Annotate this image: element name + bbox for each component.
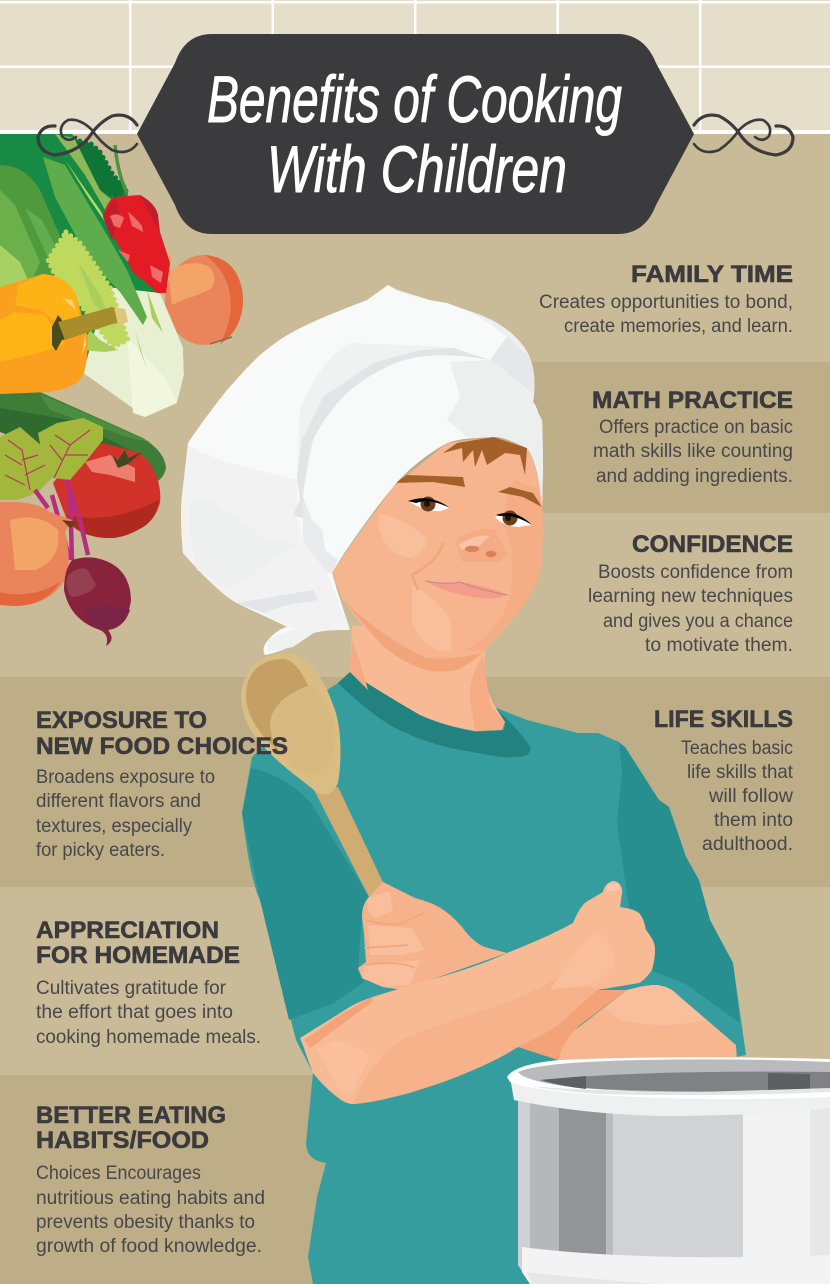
benefit: confidence: CONFIDENCE bbox=[632, 531, 793, 558]
beet stems bbox=[35, 480, 88, 560]
hair bbox=[443, 437, 527, 475]
eyes bbox=[410, 500, 450, 511]
benefit: exposure to new food choices: for picky eaters. bbox=[36, 840, 165, 861]
benefit: life skills: will follow bbox=[708, 786, 793, 807]
upper arm bbox=[558, 985, 737, 1060]
forearm and right hand bbox=[300, 881, 655, 1104]
onion bottom bbox=[0, 502, 78, 606]
tomato bbox=[53, 443, 160, 538]
pot rim bbox=[507, 1057, 830, 1099]
benefit: family time: Creates opportunities to bond, bbox=[539, 292, 793, 313]
benefit: better eating habits: HABITS/FOOD bbox=[36, 1127, 209, 1154]
left hand fist bbox=[358, 882, 507, 990]
benefit: math practice: math skills like counting bbox=[593, 441, 793, 462]
benefit: exposure to new food choices: textures, especially bbox=[36, 816, 192, 837]
eyebrows bbox=[395, 475, 542, 507]
benefit: appreciation for homemade: Cultivates gratitude for bbox=[36, 978, 227, 999]
benefit: confidence: Boosts confidence from bbox=[598, 562, 793, 583]
benefit: exposure to new food choices: Broadens exposure to bbox=[36, 767, 215, 788]
beet bbox=[64, 557, 131, 646]
yellow pepper bbox=[0, 274, 128, 394]
cheek highlights bbox=[378, 513, 452, 652]
benefit: exposure to new food choices: NEW FOOD CHOICES bbox=[36, 733, 288, 760]
benefit: better eating habits: growth of food knowledge. bbox=[36, 1236, 262, 1257]
arms bbox=[300, 881, 737, 1104]
title text bbox=[207, 62, 622, 206]
mouth bbox=[425, 581, 508, 599]
flourish left bbox=[38, 115, 137, 155]
benefit: life skills bbox=[654, 706, 794, 855]
nose bbox=[455, 529, 508, 562]
benefit: math practice: MATH PRACTICE bbox=[592, 387, 793, 414]
onion top bbox=[165, 250, 243, 345]
benefit: family time: FAMILY TIME bbox=[631, 261, 793, 288]
pot bottom band bbox=[522, 1247, 830, 1284]
benefit: better eating habits: prevents obesity thanks to bbox=[36, 1212, 255, 1233]
vegetables bbox=[0, 134, 243, 646]
benefit: math practice bbox=[592, 387, 793, 487]
benefit: appreciation for homemade: FOR HOMEMADE bbox=[36, 942, 240, 969]
benefit: better eating habits bbox=[36, 1102, 265, 1257]
flourish right bbox=[694, 115, 793, 155]
benefit: better eating habits: nutritious eating habits and bbox=[36, 1188, 265, 1209]
lettuce bbox=[0, 134, 184, 417]
red chili bbox=[103, 145, 170, 293]
title text: With Children bbox=[267, 132, 567, 206]
benefit: life skills: LIFE SKILLS bbox=[654, 706, 793, 733]
pot body bbox=[518, 1100, 830, 1284]
benefit: life skills: Teaches basic bbox=[681, 738, 793, 759]
benefit: life skills: them into bbox=[714, 810, 793, 831]
wooden spoon bbox=[241, 653, 389, 897]
benefit: family time bbox=[539, 261, 793, 337]
benefit: confidence: and gives you a chance bbox=[603, 611, 793, 632]
benefit: appreciation for homemade: APPRECIATION bbox=[36, 917, 219, 944]
benefit: confidence: learning new techniques bbox=[588, 586, 793, 607]
tiled wall bbox=[0, 0, 830, 134]
chef hat bbox=[181, 285, 543, 655]
benefit: confidence: to motivate them. bbox=[645, 635, 793, 656]
pot collar bbox=[511, 1075, 830, 1116]
benefit: math practice: and adding ingredients. bbox=[596, 466, 793, 487]
benefit: appreciation for homemade: the effort that goes into bbox=[36, 1002, 233, 1023]
cucumber bbox=[0, 392, 166, 482]
benefit: appreciation for homemade bbox=[36, 917, 261, 1048]
benefit: family time: create memories, and learn. bbox=[564, 316, 793, 337]
boy bbox=[181, 285, 746, 1284]
title text: Benefits of Cooking bbox=[207, 62, 622, 136]
shirt bbox=[242, 672, 746, 1284]
benefit: appreciation for homemade: cooking homemade meals. bbox=[36, 1027, 261, 1048]
shaded inner arm bbox=[518, 990, 627, 1060]
benefit: exposure to new food choices: different flavors and bbox=[36, 791, 201, 812]
benefit: better eating habits: BETTER EATING bbox=[36, 1102, 226, 1129]
benefit: confidence bbox=[588, 531, 793, 656]
benefit: math practice: Offers practice on basic bbox=[599, 417, 793, 438]
neck bbox=[350, 625, 505, 731]
smile crease bbox=[412, 542, 443, 590]
title badge bbox=[137, 34, 694, 234]
collar bbox=[338, 672, 531, 757]
beet leaves bbox=[0, 418, 103, 500]
benefit: life skills: life skills that bbox=[687, 762, 794, 783]
benefit: exposure to new food choices: EXPOSURE TO bbox=[36, 707, 207, 734]
benefit: better eating habits: Choices Encourages bbox=[36, 1163, 201, 1184]
benefit: exposure to new food choices bbox=[36, 707, 288, 861]
pot bbox=[507, 1057, 830, 1284]
face bbox=[332, 437, 543, 672]
benefit: life skills: adulthood. bbox=[702, 834, 793, 855]
